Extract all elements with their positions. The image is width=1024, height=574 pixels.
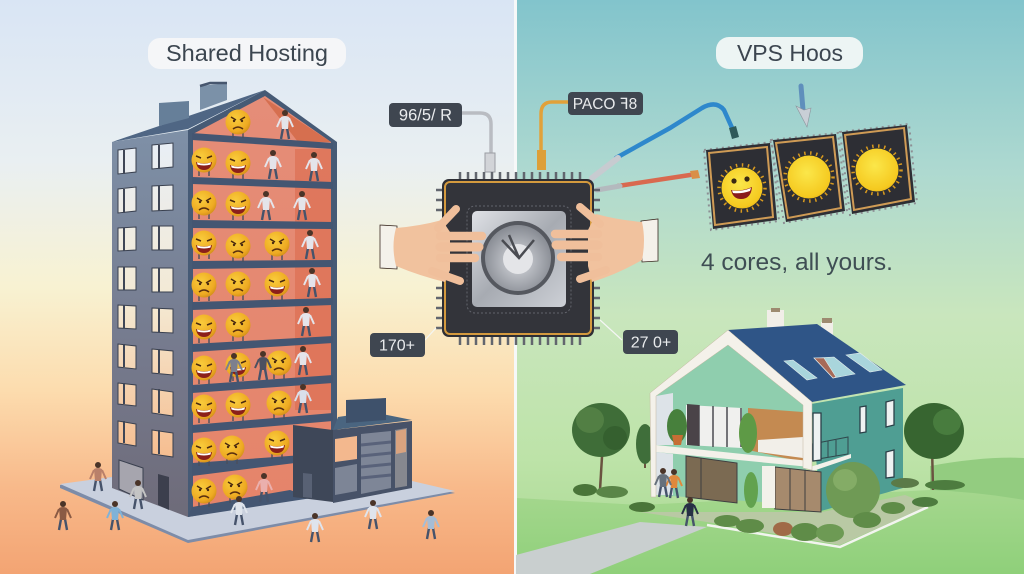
leader lines <box>425 320 622 340</box>
gable wall <box>656 340 806 505</box>
label: 270+ <box>623 330 678 354</box>
heading: Shared Hosting: Shared Hosting <box>166 40 328 66</box>
right hand <box>555 207 658 282</box>
roof <box>728 324 906 402</box>
arrow pointing at chips <box>796 86 811 127</box>
red cable silver sleeve <box>597 186 620 190</box>
background: shared hosting side <box>0 0 515 574</box>
dial <box>481 221 555 295</box>
core chip 2 <box>771 133 847 223</box>
panel: three dedicated CPU core chips <box>704 124 917 230</box>
windows <box>118 143 173 500</box>
label: CPU left <box>389 103 462 127</box>
grey cable <box>460 113 491 155</box>
plaza slab <box>60 477 455 543</box>
floor slabs <box>188 133 333 517</box>
blue cable silver sleeve <box>592 158 618 178</box>
angry emoji residents <box>192 110 292 507</box>
chimneys <box>159 83 227 126</box>
caption: 4 cores, all yours.: 4 cores, all yours. <box>701 249 893 276</box>
people inside the building <box>226 110 322 502</box>
path and garden bed <box>516 495 930 574</box>
right wall <box>811 388 903 511</box>
left hand <box>380 209 482 282</box>
balcony railing <box>812 437 848 460</box>
door <box>158 474 169 510</box>
lawn on VPS side <box>517 458 1024 574</box>
floor slab <box>656 445 851 472</box>
right wall windows <box>813 400 894 478</box>
blue cable <box>616 104 733 158</box>
left soffit <box>656 393 673 445</box>
background: VPS hosting side <box>515 0 1024 574</box>
upper room <box>686 404 803 462</box>
cables to chip <box>460 102 733 190</box>
annex building <box>293 398 412 503</box>
panel: shared hosting apartment building <box>55 83 455 543</box>
people near house <box>655 468 698 526</box>
roof <box>112 90 265 142</box>
label: CPU right: PACO ꟻ8 <box>573 96 637 113</box>
trees <box>572 403 964 490</box>
upper balcony plant <box>667 409 757 453</box>
heading: VPS Hoos <box>716 37 863 69</box>
label: 170+ <box>370 333 425 357</box>
white gable frame <box>650 330 812 497</box>
label: 170+: 170+ <box>379 338 415 354</box>
orange cable <box>541 102 568 152</box>
centre divider <box>514 0 517 574</box>
metal plate <box>472 211 566 307</box>
label: 270+: 27 0+ <box>631 334 671 352</box>
label: CPU left: 96/5/ R <box>399 106 452 124</box>
skylights <box>784 353 882 380</box>
label: CPU right <box>568 92 643 115</box>
building side wall <box>112 130 188 517</box>
chip pins <box>436 172 600 345</box>
panel: VPS detached house <box>516 308 965 574</box>
heading: Shared Hosting <box>148 38 346 69</box>
chimneys <box>767 308 833 349</box>
window mullions <box>124 145 159 454</box>
core chip 3 <box>840 124 917 215</box>
cable connectors <box>485 126 739 179</box>
people on the plaza <box>55 462 439 542</box>
red cable <box>618 175 690 186</box>
core chip 1 <box>704 142 779 230</box>
heading: VPS Hoos: VPS Hoos <box>737 40 843 66</box>
interior rooms <box>193 96 331 513</box>
shrubs <box>573 462 965 542</box>
front section frame <box>188 90 337 517</box>
panel: central CPU chip <box>380 172 658 345</box>
ground floor glass <box>686 456 821 512</box>
